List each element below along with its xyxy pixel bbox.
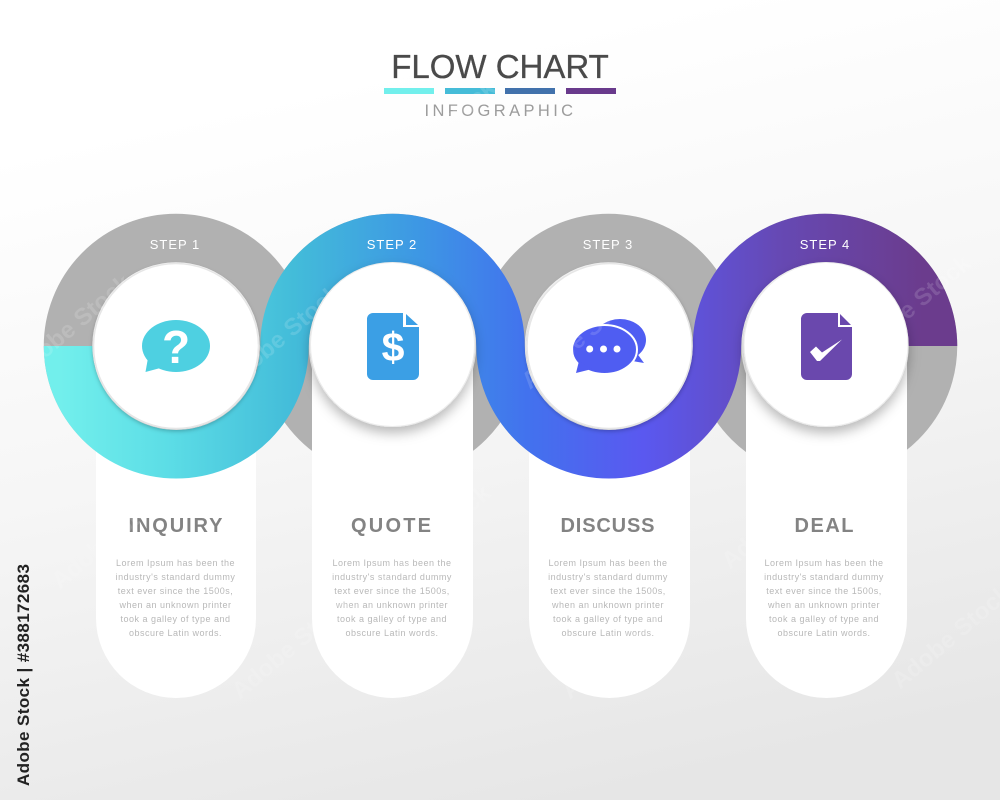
watermark: Adobe Stock [7, 269, 137, 385]
step 4 body text: text ever since the 1500s, [766, 586, 882, 596]
step 1 body text: industry's standard dummy [116, 572, 235, 582]
icon: question bubble: ? [162, 321, 190, 373]
step headings: QUOTE [351, 515, 431, 537]
step 3 body text: industry's standard dummy [548, 572, 668, 582]
title: FLOW CHART [391, 48, 609, 85]
step labels [150, 237, 850, 252]
white circle 4 [744, 262, 908, 426]
watermark: Adobe Stock [367, 479, 497, 595]
step 1 body text: Lorem Ipsum has been the [116, 558, 235, 568]
step 4 body text [764, 558, 884, 638]
title colour bars [384, 88, 616, 94]
watermark: Adobe Stock [717, 459, 847, 575]
step 2 body text: text ever since the 1500s, [334, 586, 450, 596]
step 4 body text: took a galley of type and [769, 614, 879, 624]
white circle 1 [94, 264, 258, 428]
step headings [128, 515, 854, 537]
watermark: Adobe Stock [217, 279, 347, 395]
step 3 body text: obscure Latin words. [561, 628, 655, 638]
watermark: Adobe Stock [847, 249, 977, 365]
step 2 body text: took a galley of type and [337, 614, 447, 624]
icon: check document [801, 313, 852, 380]
step 2 body text: Lorem Ipsum has been the [332, 558, 452, 568]
stock image id: Adobe Stock | #388172683 [14, 564, 33, 786]
step headings: DEAL [794, 515, 854, 537]
icon: dollar document [367, 313, 419, 380]
step 4 body text: obscure Latin words. [777, 628, 871, 638]
step labels: STEP 1 [150, 237, 200, 252]
gradient wave band [68, 238, 933, 454]
step 4 body text: Lorem Ipsum has been the [764, 558, 884, 568]
icon: dollar document: $ [382, 324, 405, 370]
step 1 body text: when an unknown printer [118, 600, 232, 610]
step 1 body text: took a galley of type and [120, 614, 231, 624]
step labels: STEP 2 [367, 237, 417, 252]
step 3 body text: when an unknown printer [551, 600, 664, 610]
step 2 body text: obscure Latin words. [345, 628, 439, 638]
white circle 2 [310, 262, 474, 426]
white circle 3 [527, 264, 692, 428]
step labels: STEP 3 [583, 237, 633, 252]
watermark: Adobe Stock [372, 74, 502, 190]
watermark: Adobe Stock [707, 79, 837, 195]
watermark: Adobe Stock [37, 69, 167, 185]
icon: chat bubbles [572, 319, 646, 374]
step 3 body text: took a galley of type and [553, 614, 663, 624]
grey rings [68, 238, 933, 454]
step 2 body text: when an unknown printer [335, 600, 448, 610]
icon: question bubble [142, 320, 210, 373]
step 2 body text [332, 558, 452, 638]
step 3 body text [548, 558, 668, 638]
watermark: Adobe Stock [557, 589, 687, 705]
watermark: Adobe Stock [227, 589, 357, 705]
step 1 body text: text ever since the 1500s, [118, 586, 233, 596]
step 1 body text [116, 558, 235, 638]
step 3 body text: text ever since the 1500s, [550, 586, 666, 596]
step headings: DISCUSS [560, 515, 654, 537]
step headings: INQUIRY [128, 515, 223, 537]
step 2 body text: industry's standard dummy [332, 572, 452, 582]
watermark: Adobe Stock [517, 279, 647, 395]
step 4 body text: industry's standard dummy [764, 572, 884, 582]
watermark [7, 69, 1000, 705]
step 1 body text: obscure Latin words. [129, 628, 222, 638]
step 3 body text: Lorem Ipsum has been the [548, 558, 668, 568]
white pills [96, 346, 907, 698]
subtitle: INFOGRAPHIC [424, 102, 576, 120]
watermark: Adobe Stock [47, 479, 177, 595]
step 4 body text: when an unknown printer [767, 600, 880, 610]
step labels: STEP 4 [800, 237, 850, 252]
